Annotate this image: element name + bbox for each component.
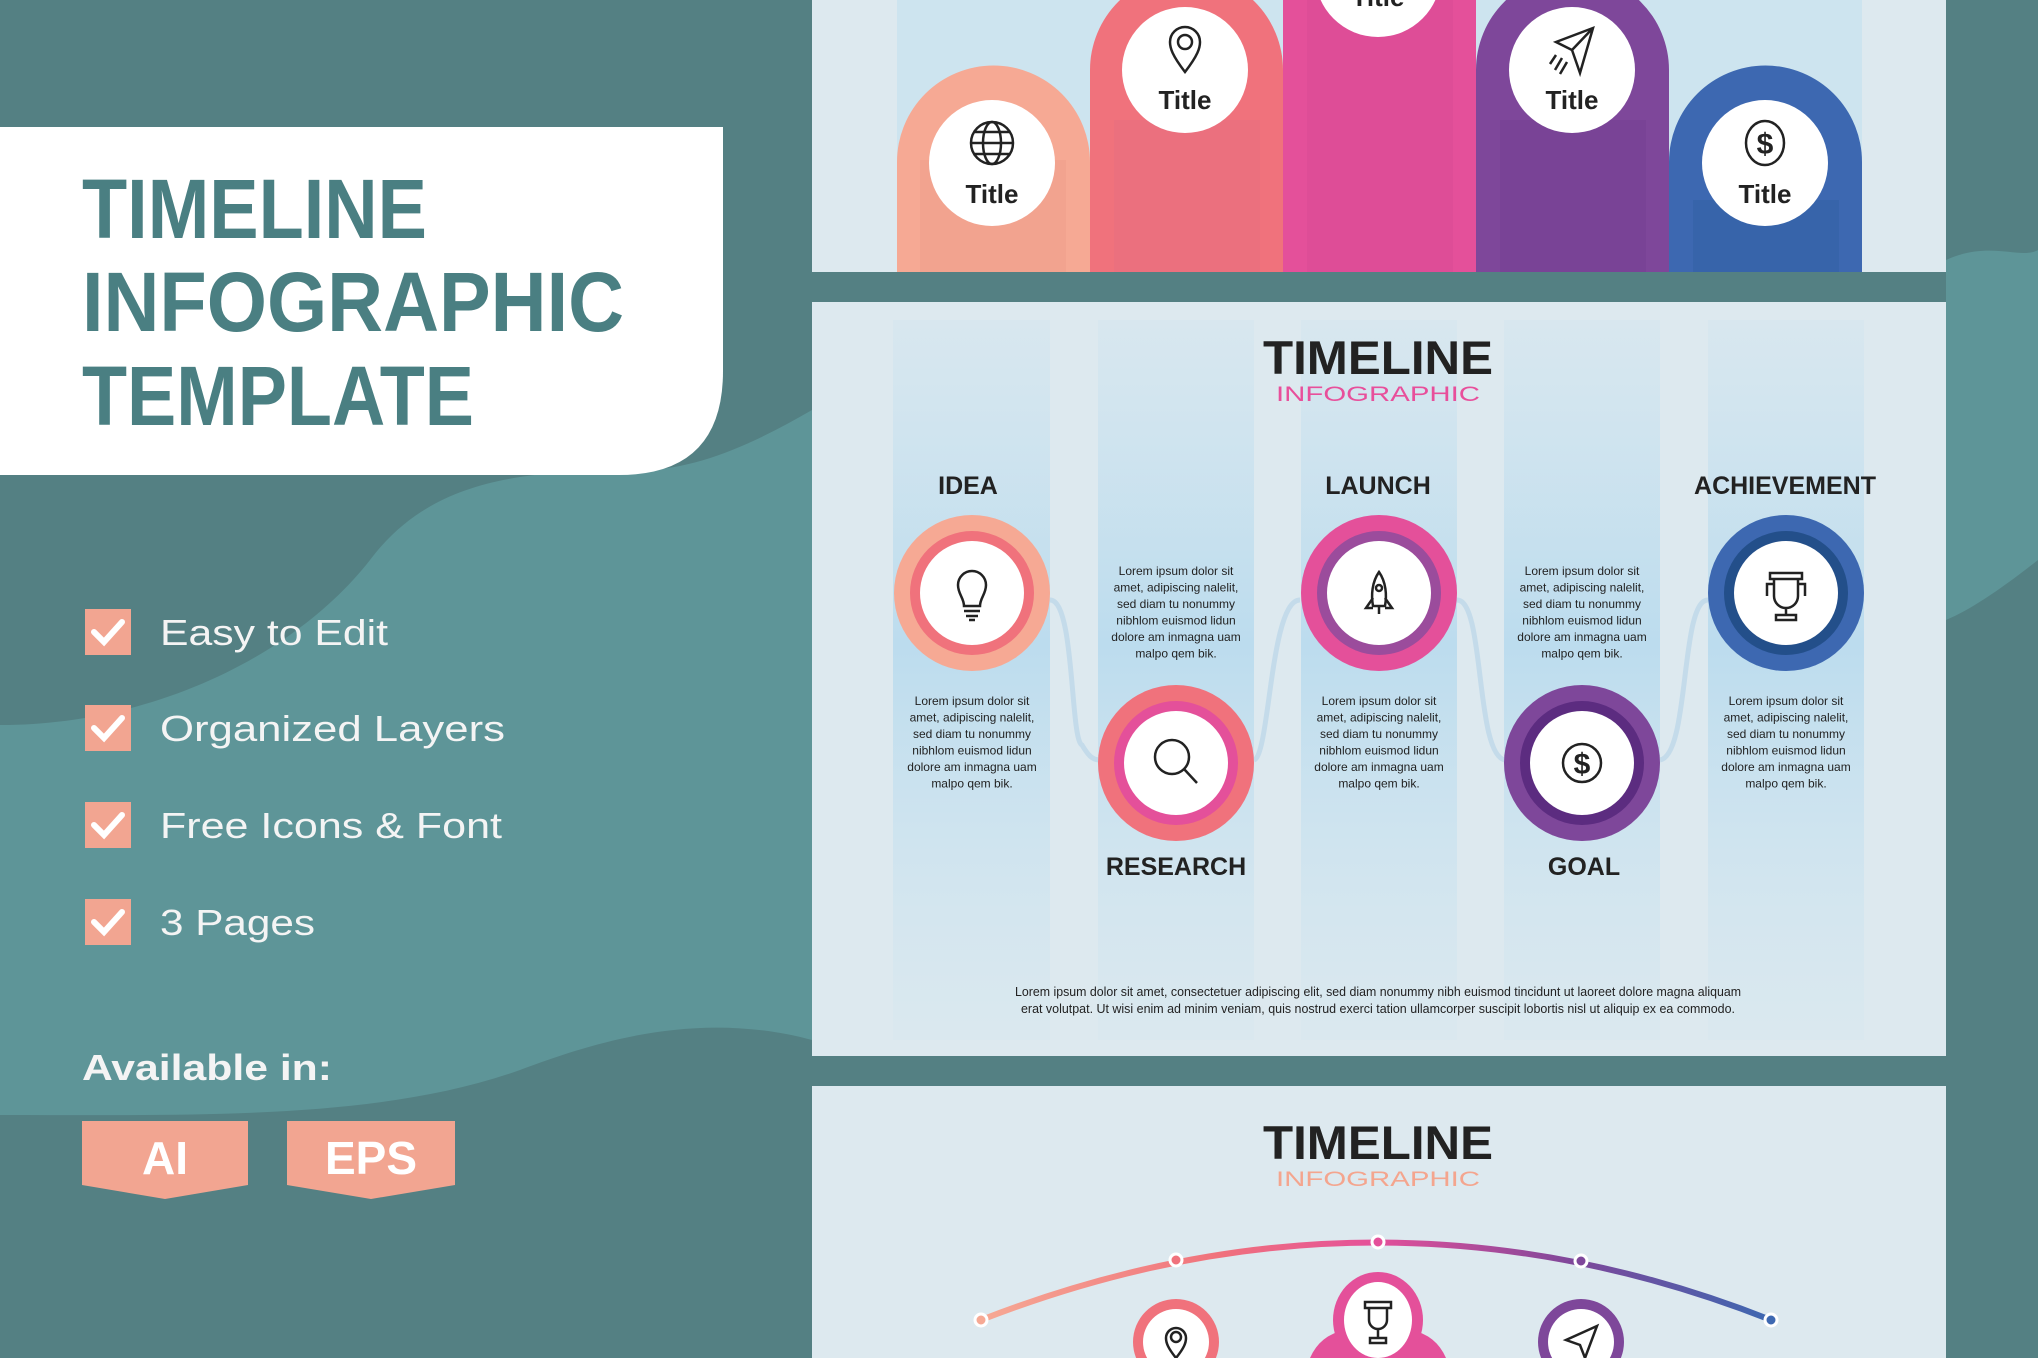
icon: trophy [1767,573,1805,620]
marker: plane [1538,1299,1624,1358]
paragraph texts: nibhlom euismod lidun [1319,744,1439,758]
footer text [1015,985,1741,1016]
paragraph texts: dolore am inmagna uam [1111,630,1241,644]
paragraph texts: Lorem ipsum dolor sit [1729,694,1844,708]
title card [0,127,723,475]
title text: TEMPLATE [82,349,474,443]
paragraph texts: sed diam tu nonummy [913,727,1031,741]
paragraph texts: sed diam tu nonummy [1117,597,1235,611]
arc [981,1242,1771,1320]
step: ACHIEVEMENT [1694,472,1876,671]
paragraph texts: malpo qem bik. [1338,776,1420,790]
paragraph texts [907,564,1851,790]
icon: dollar coin: $ [1757,128,1774,161]
paragraph texts: amet, adipiscing nalelit, [1114,580,1238,594]
column stripes [893,320,1864,1040]
panel 3 title: TIMELINE [1263,1116,1493,1169]
column 4: Title [1546,85,1598,115]
step: GOAL: GOAL [1548,853,1620,881]
panel 2 title [1263,331,1493,406]
item: Easy to Edit [85,609,388,655]
paragraph texts: nibhlom euismod lidun [1726,744,1846,758]
paragraph texts: nibhlom euismod lidun [1522,614,1642,628]
paragraph texts: amet, adipiscing nalelit, [1520,580,1644,594]
column 3 [1283,0,1476,272]
panel 2 title: TIMELINE [1263,331,1493,384]
column 5: Title [1739,179,1791,209]
column 5 [1669,66,1862,272]
step: RESEARCH: RESEARCH [1106,853,1246,881]
item: Free Icons & Font: Free Icons & Font [160,805,502,846]
item: Free Icons & Font [85,802,502,848]
panel 2 title: INFOGRAPHIC [1276,383,1480,406]
icon: dollar coin [1746,121,1784,165]
column 2 [1090,0,1283,272]
paragraph texts: nibhlom euismod lidun [1116,614,1236,628]
paragraph texts: amet, adipiscing nalelit, [910,710,1034,724]
marker: location [1133,1299,1219,1358]
paragraph texts: malpo qem bik. [931,776,1013,790]
paragraph texts: sed diam tu nonummy [1320,727,1438,741]
paragraph texts: nibhlom euismod lidun [912,744,1032,758]
marker: trophy [1310,1272,1446,1358]
paragraph texts: dolore am inmagna uam [907,760,1037,774]
panel 3 title: INFOGRAPHIC [1276,1168,1480,1191]
badge: EPS [287,1121,455,1199]
badge: EPS: EPS [325,1132,417,1184]
feature checklist [85,609,505,945]
icon: paper plane [1550,28,1593,74]
item: 3 Pages [85,899,315,945]
paragraph texts: dolore am inmagna uam [1517,630,1647,644]
paragraph texts: amet, adipiscing nalelit, [1317,710,1441,724]
icon: dollar [1563,744,1601,782]
title text: INFOGRAPHIC [82,255,624,349]
connectors [1050,600,1708,760]
panel 3: arc timeline [812,1086,1946,1358]
footer text: Lorem ipsum dolor sit amet, consectetuer adipiscing elit, sed diam nonummy nibh euismod tincidunt ut laoreet dolore magna aliquam [1015,985,1741,999]
step: GOAL [1504,685,1660,881]
badge: AI: AI [142,1132,188,1184]
item: Easy to Edit: Easy to Edit [160,612,388,653]
panel 3 title [1263,1116,1493,1191]
panel 1: arch columns [812,0,1946,272]
paragraph texts: dolore am inmagna uam [1314,760,1444,774]
title text: TIMELINE [82,162,427,256]
paragraph texts: amet, adipiscing nalelit, [1724,710,1848,724]
step: IDEA [894,472,1050,671]
arc dots [975,1236,1777,1326]
paragraph texts: Lorem ipsum dolor sit [915,694,1030,708]
icon: magnifier [1155,740,1197,783]
footer text: erat volutpat. Ut wisi enim ad minim veniam, quis nostrud exerci tation ullamcorper suscipit lobortis nisl ut aliquip ex ea commodo. [1021,1002,1735,1016]
paragraph texts: malpo qem bik. [1541,646,1623,660]
title text [82,162,624,443]
step: LAUNCH [1301,472,1457,671]
available in heading: Available in: [82,1047,332,1088]
panel 2: wave timeline [812,302,1946,1056]
step: LAUNCH: LAUNCH [1325,472,1431,500]
icon: light bulb [958,571,986,620]
paragraph texts: Lorem ipsum dolor sit [1525,564,1640,578]
icon: dollar: $ [1574,748,1591,781]
paragraph texts: dolore am inmagna uam [1721,760,1851,774]
badge: AI [82,1121,248,1199]
paragraph texts: Lorem ipsum dolor sit [1322,694,1437,708]
paragraph texts: malpo qem bik. [1745,776,1827,790]
icon: rocket [1366,572,1392,614]
background waves [0,250,2038,1115]
column 2: Title [1159,85,1211,115]
step: ACHIEVEMENT: ACHIEVEMENT [1694,472,1876,500]
step: RESEARCH [1098,685,1254,881]
icon: location pin [1170,27,1200,72]
item: 3 Pages: 3 Pages [160,902,315,943]
step: IDEA: IDEA [938,472,998,500]
paragraph texts: sed diam tu nonummy [1727,727,1845,741]
column 1: Title [966,179,1018,209]
column 4 [1476,0,1669,272]
item: Organized Layers [85,705,505,751]
item: Organized Layers: Organized Layers [160,708,505,749]
icon: globe [971,122,1013,164]
paragraph texts: Lorem ipsum dolor sit [1119,564,1234,578]
paragraph texts: malpo qem bik. [1135,646,1217,660]
paragraph texts: sed diam tu nonummy [1523,597,1641,611]
column 1 [897,66,1090,272]
